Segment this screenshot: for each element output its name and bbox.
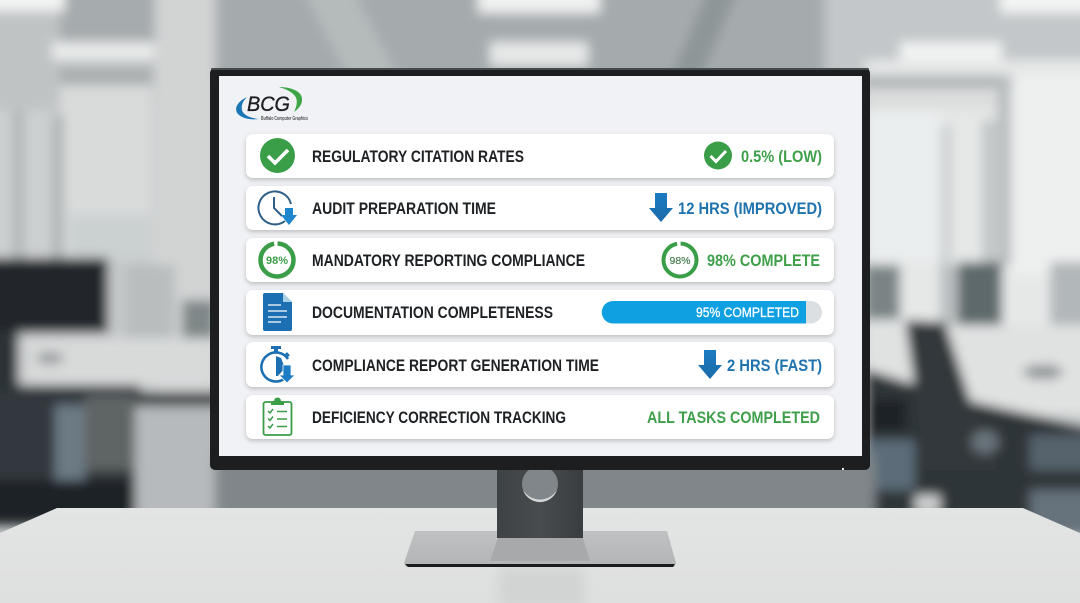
icon: clipboard checklist: [264, 398, 292, 435]
icon: clock with down arrow: [258, 191, 297, 225]
label: regulatory citation rates: REGULATORY CITATION RATES: [312, 148, 524, 166]
label: documentation completeness: DOCUMENTATION COMPLETENESS: [312, 304, 553, 322]
stand base: [404, 531, 676, 567]
row: audit preparation time: [246, 186, 834, 230]
icon: down arrow: [698, 350, 722, 379]
value: 98% complete: 98% COMPLETE: [707, 252, 820, 270]
progress bar 95%: [602, 301, 822, 324]
icon: small green check circle: [704, 142, 732, 170]
progress bar 95%: 95% COMPLETED: [696, 304, 799, 320]
label: compliance report generation time: COMPLIANCE REPORT GENERATION TIME: [312, 357, 599, 375]
icon: stopwatch with down arrow: [261, 346, 295, 383]
logo: BCG Buffalo Computer Graphics: Buffalo Computer Graphics: [261, 116, 308, 122]
label: mandatory reporting compliance: MANDATORY REPORTING COMPLIANCE: [312, 252, 585, 270]
row: deficiency correction tracking: [246, 395, 834, 439]
icon: document: [263, 293, 292, 331]
value: 12 hrs improved: 12 HRS (IMPROVED): [678, 200, 822, 218]
stand reflection on desk: [498, 568, 584, 603]
screen: [219, 76, 862, 456]
row: compliance report generation time: [246, 342, 834, 387]
icon: 98% progress ring: 98%: [266, 255, 288, 267]
monitor bezel: [210, 68, 870, 470]
logo: BCG Buffalo Computer Graphics: [236, 87, 308, 122]
icon: green check circle: [260, 138, 295, 173]
row: documentation completeness: [246, 290, 834, 335]
label: deficiency correction tracking: DEFICIENCY CORRECTION TRACKING: [312, 409, 566, 427]
icon: 98% progress ring: [260, 243, 294, 277]
icon: 98% progress ring small: 98%: [669, 255, 691, 267]
monitor: [210, 68, 870, 470]
stand neck with cable hole: [497, 466, 583, 538]
icon: 98% progress ring small: [663, 243, 697, 277]
logo: BCG Buffalo Computer Graphics: BCG: [247, 93, 290, 116]
value: 0.5% low: 0.5% (LOW): [741, 148, 822, 166]
row: mandatory reporting compliance: [246, 238, 834, 282]
label: audit preparation time: AUDIT PREPARATION TIME: [312, 200, 496, 218]
value: 2 hrs fast: 2 HRS (FAST): [727, 357, 822, 375]
icon: down arrow: [649, 193, 673, 222]
row: regulatory citation rates: [246, 134, 834, 178]
value: all tasks completed: ALL TASKS COMPLETED: [647, 409, 820, 427]
desk surface: [0, 508, 1080, 603]
monitor stand: [404, 466, 676, 603]
